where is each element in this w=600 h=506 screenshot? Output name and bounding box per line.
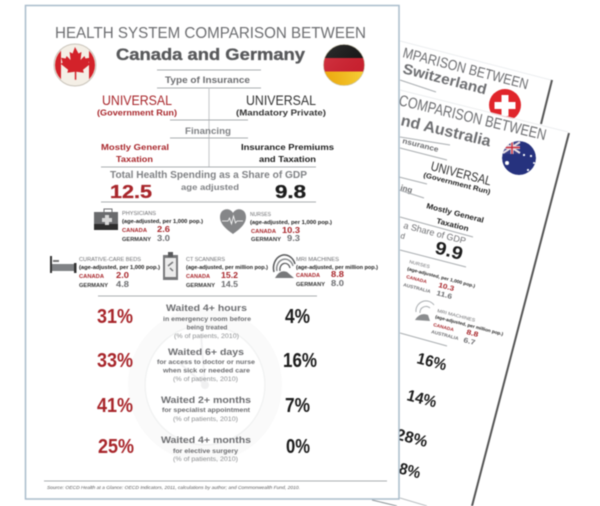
row: elective surgery wait: Waited 4+ months [161, 435, 251, 445]
heading: Type of Insurance: Type of Insurance [165, 75, 250, 86]
text: Australia sheet MRI machines: 8.8 [465, 329, 479, 339]
text: Australia sheet MRI machines: AUSTRALIA [431, 329, 460, 341]
stat: MRI machines: GERMANY [296, 282, 326, 288]
stat: curative-care beds: GERMANY [79, 283, 109, 289]
stat: CT scanners: 14.5 [221, 280, 239, 289]
text: Canada financing: Taxation [116, 155, 153, 164]
row: doctor access wait: when sick or needed care [162, 368, 250, 374]
text: Canada insurance: (Government Run) [97, 108, 177, 118]
text: Canada insurance: UNIVERSAL [102, 92, 172, 108]
stat: CT scanners: CT SCANNERS [186, 257, 226, 263]
text: Australia sheet insurance and financing: Taxation [435, 216, 470, 233]
stat: nurses [220, 209, 332, 243]
text: Australia sheet MRI machines: CANADA [433, 322, 455, 332]
text: Germany financing: and Taxation [259, 155, 316, 164]
icon: MRI scanner [273, 255, 295, 278]
text: Canada financing: Mostly General [101, 143, 169, 152]
heading: Financing: Financing [185, 126, 231, 136]
text: Canada financing [101, 143, 169, 164]
row: doctor access wait: (% of patients, 2010) [173, 377, 238, 383]
heading: Type of Insurance [157, 70, 261, 88]
text: Australia sheet insurance and financing: ing [399, 183, 413, 195]
text: Australia sheet insurance and financing: nsurance [402, 136, 440, 154]
stat: physicians: (age-adjusted, per 1,000 pop.) [122, 219, 203, 225]
icon: German flag [323, 44, 365, 86]
stat: physicians: CANADA [122, 228, 147, 234]
icon: clock watermark [136, 316, 274, 454]
text: Australia sheet GDP share: d [399, 231, 406, 241]
row: elective surgery wait: for elective surgery [173, 448, 238, 455]
text: Australia sheet nurses: 11.6 [435, 290, 453, 301]
text: Germany insurance: UNIVERSAL [246, 92, 316, 108]
heading: Financing [170, 120, 248, 138]
heading: Australia sheet title: nd Australia [399, 112, 493, 150]
text: Australia sheet GDP share: a Share of GDP [402, 220, 467, 246]
text: Canada insurance [97, 92, 177, 118]
row: elective surgery wait [98, 435, 310, 463]
stat: physicians: PHYSICIANS [122, 211, 157, 217]
row: emergency room wait [97, 303, 310, 340]
row: emergency room wait: in emergency room before [163, 316, 251, 323]
stat: Canada GDP share: 12.5 [110, 182, 152, 202]
text: Australia sheet insurance and financing: Mostly General [425, 201, 485, 225]
text: Australia sheet nurses [403, 259, 476, 301]
stat: curative-care beds: CURATIVE-CARE BEDS [79, 257, 142, 263]
row: elective surgery wait: 0% [286, 436, 310, 458]
text: Australia sheet waiting percentages: 28% [394, 426, 429, 451]
icon: hospital bed [50, 256, 76, 273]
text: Australia sheet nurses: CANADA [406, 274, 428, 284]
row: emergency room wait: Waited 4+ hours [166, 303, 247, 313]
row: doctor access wait: 16% [283, 350, 317, 372]
stat: nurses: 9.3 [287, 234, 301, 243]
stat: MRI machines [273, 255, 378, 288]
sheet: Switzerland comparison behind [399, 40, 552, 130]
text: Australia sheet MRI machines: 6.7 [462, 337, 476, 347]
stat: physicians [94, 209, 203, 243]
stat: MRI machines: 8.0 [331, 279, 345, 288]
heading: Total Health Spending [110, 170, 307, 192]
stat: physicians: 2.6 [157, 225, 171, 234]
stat: curative-care beds [50, 256, 160, 289]
stat: nurses: GERMANY [251, 237, 282, 243]
row: specialist appointment wait: (% of patients, 2010) [173, 417, 238, 423]
text: Australia sheet MRI machines [400, 301, 504, 347]
heading: Canada and Germany: Canada and Germany [116, 45, 306, 64]
text: Australia sheet MRI machines: MRI MACHINES [437, 308, 476, 323]
icon: heart with pulse [220, 209, 246, 234]
heading: Total Health Spending: Total Health Spending as a Share of GDP [110, 170, 307, 181]
stat: MRI machines: MRI MACHINES [296, 257, 340, 263]
icon: clipboard [163, 252, 178, 280]
stat: curative-care beds: 2.0 [116, 271, 130, 280]
stat: MRI machines: (age-adjusted, per million pop.) [296, 265, 378, 271]
stat: CT scanners: CANADA [186, 274, 210, 280]
title: HEALTH SYSTEM COMPARISON BETWEEN [55, 25, 366, 42]
icon: medical bag [94, 209, 118, 230]
stat: Germany GDP share: 9.8 [275, 182, 306, 202]
row: emergency room wait: (% of patients, 2010) [174, 334, 239, 340]
text: Australia sheet waiting percentages: 38% [389, 458, 422, 482]
text: Germany financing [241, 143, 335, 164]
row: specialist appointment wait [97, 395, 310, 423]
row: specialist appointment wait: Waited 2+ months [161, 395, 251, 405]
heading: Total Health Spending: age adjusted [181, 182, 239, 192]
stat: MRI machines: 8.8 [331, 270, 345, 279]
heading: Australia sheet title: COMPARISON BETWEEN [397, 92, 548, 144]
source note: Source: OECD Health at a Glance: OECD Indicators, 2011, calculations by author; and Commonwealth Fund, 2010. [47, 485, 300, 490]
stat: nurses: 10.3 [282, 226, 301, 235]
row: emergency room wait: being treated [187, 324, 227, 332]
sheet: Switzerland comparison behind: MPARISON BETWEEN [401, 45, 530, 93]
row: specialist appointment wait: 7% [285, 395, 310, 417]
stat: curative-care beds: (age-adjusted, per 1,000 pop.) [79, 265, 160, 271]
stat: nurses: CANADA [251, 229, 276, 235]
text: Australia sheet GDP share: 9.9 [433, 238, 465, 264]
icon: Australian flag [502, 141, 536, 175]
row: doctor access wait [97, 347, 317, 383]
sheet: Switzerland comparison behind: Switzerland [401, 61, 488, 98]
row: emergency room wait: 4% [285, 306, 310, 328]
text: Germany insurance [236, 92, 326, 118]
text: Australia sheet GDP share [399, 220, 467, 267]
text: Australia sheet insurance and financing: UNIVERSAL [429, 158, 493, 188]
stat: nurses: (age-adjusted, per 1,000 pop.) [250, 220, 332, 226]
stat: CT scanners: (age-adjusted, per million pop.) [186, 265, 268, 271]
icon: Canadian flag [54, 44, 96, 86]
row: doctor access wait: 33% [97, 350, 133, 372]
text: Australia sheet nurses: AUSTRALIA [403, 282, 432, 294]
row: specialist appointment wait: 41% [97, 395, 133, 417]
text: Germany financing: Insurance Premiums [241, 143, 335, 152]
text: Australia sheet insurance and financing: (Government Run) [422, 172, 491, 196]
row: emergency room wait: 31% [97, 306, 133, 328]
row: elective surgery wait: 25% [98, 436, 134, 458]
text: Germany insurance: (Mandatory Private) [236, 108, 326, 118]
row: doctor access wait: Waited 6+ days [168, 347, 244, 357]
text: Australia sheet waiting percentages: 16% [415, 350, 448, 374]
panel: Canada and Germany main sheet [26, 6, 399, 499]
stat: nurses: NURSES [250, 212, 272, 218]
stat: CT scanners: 15.2 [221, 271, 239, 280]
row: doctor access wait: for access to doctor or nurse [157, 359, 255, 366]
stat: physicians: 3.0 [157, 234, 171, 243]
stat: curative-care beds: CANADA [79, 274, 104, 280]
text: Australia sheet nurses: (age-adjusted, per 1,000 pop.) [407, 266, 476, 289]
text: Australia sheet nurses: 10.3 [437, 282, 455, 293]
row: specialist appointment wait: for specialist appointment [162, 407, 251, 414]
text: Australia sheet insurance and financing [399, 136, 493, 237]
text: Australia sheet MRI machines: (age-adjusted, per million pop.) [435, 314, 504, 337]
stat: physicians: GERMANY [122, 237, 152, 243]
stat: curative-care beds: 4.8 [116, 280, 130, 289]
stat: MRI machines: CANADA [296, 273, 320, 279]
text: Australia sheet nurses: NURSES [409, 259, 430, 269]
row: elective surgery wait: (% of patients, 2010) [173, 457, 238, 463]
text: Australia sheet waiting percentages: 14% [405, 387, 438, 411]
stat: CT scanners [163, 252, 268, 289]
stat: CT scanners: GERMANY [186, 283, 216, 289]
sheet: Australia comparison behind [372, 90, 569, 506]
text: Australia sheet waiting percentages [389, 350, 448, 482]
